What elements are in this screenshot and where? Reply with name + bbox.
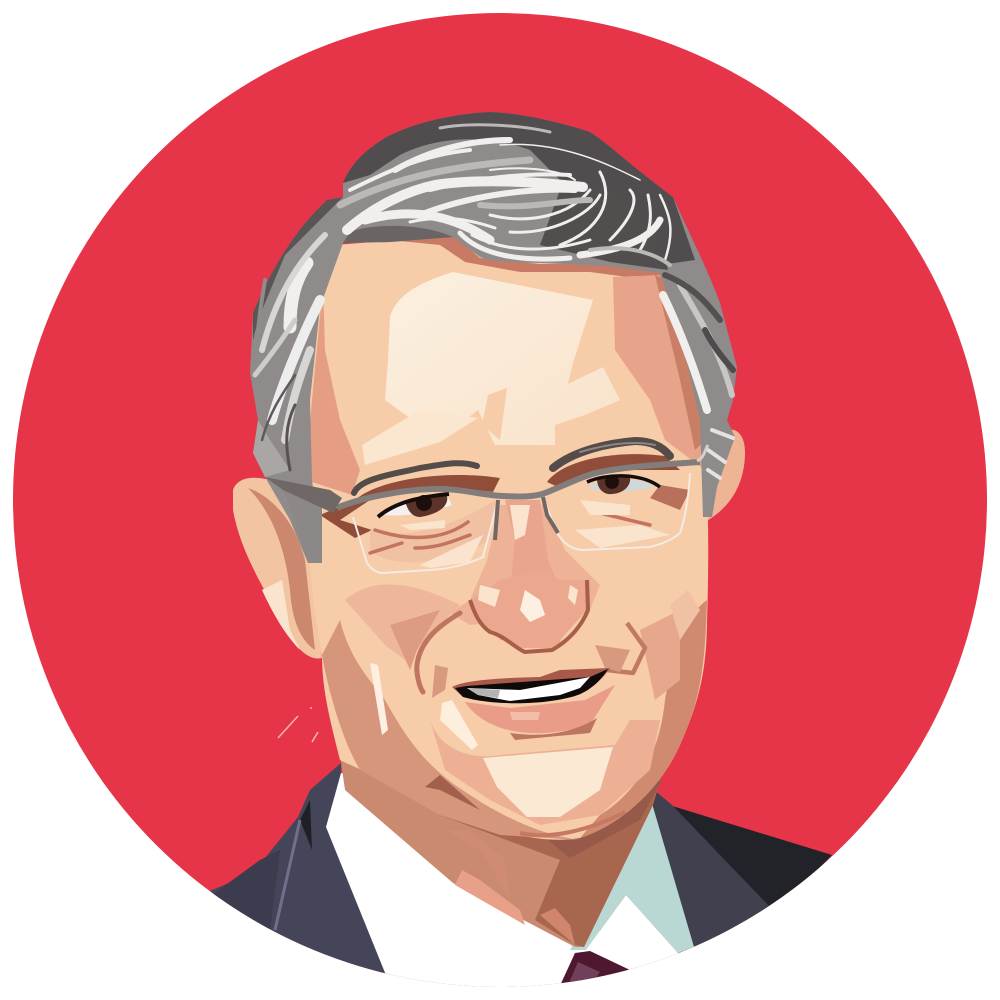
nasolabial crease left xyxy=(417,613,460,692)
left temple shade xyxy=(306,285,360,495)
glasses xyxy=(265,445,708,573)
chin shadow xyxy=(430,720,660,825)
brow shadow left xyxy=(320,475,500,538)
sideburn left xyxy=(283,490,322,563)
hair gray strands top xyxy=(340,125,670,265)
left ear xyxy=(233,478,322,658)
glasses front bar xyxy=(337,462,700,508)
glasses temple arm xyxy=(265,477,342,513)
crease shadow left xyxy=(390,610,440,670)
hairline shadow xyxy=(390,235,665,282)
forehead highlight xyxy=(385,272,620,445)
suit jacket right xyxy=(652,792,832,954)
mouth corners xyxy=(432,645,630,698)
glasses left lens xyxy=(353,500,498,573)
hair white strands top xyxy=(347,140,670,260)
right eye xyxy=(587,475,660,494)
stray marks xyxy=(278,708,318,742)
under eye highlight left xyxy=(400,520,483,568)
hair dark lower wave xyxy=(343,226,453,243)
chin highlight xyxy=(483,747,613,817)
hair dark left xyxy=(253,197,343,340)
nose outline xyxy=(470,580,588,652)
glasses hinge xyxy=(697,445,708,461)
chin underline xyxy=(520,812,625,835)
glasses nose pad right xyxy=(543,497,558,533)
mouth xyxy=(452,668,610,703)
nose bridge xyxy=(500,500,565,645)
lower lip shade xyxy=(465,685,615,733)
right lower face xyxy=(580,600,707,838)
under eye highlight right xyxy=(575,500,670,548)
right temple shade xyxy=(613,275,705,470)
glasses nose pad left xyxy=(495,500,498,540)
hair strands left xyxy=(255,235,325,470)
nose side shading xyxy=(450,505,600,625)
face base xyxy=(307,235,708,840)
brow shadow right xyxy=(547,454,680,488)
nasolabial crease right xyxy=(607,623,645,673)
hair dark top rim xyxy=(343,112,695,265)
left eye xyxy=(378,494,452,517)
left lower face xyxy=(322,620,580,840)
hair strands right xyxy=(663,275,733,478)
hair xyxy=(250,112,737,563)
right eyebrow xyxy=(553,441,670,468)
suit jacket left xyxy=(210,763,390,974)
left cheek plane xyxy=(345,584,460,660)
cheek highlight left xyxy=(370,663,388,735)
left eyebrow xyxy=(354,463,477,493)
nose tip xyxy=(470,570,587,648)
under eye creases xyxy=(370,513,650,553)
glasses right lens xyxy=(543,473,690,550)
hair mass xyxy=(250,112,737,563)
eye socket left xyxy=(370,500,495,562)
neck xyxy=(340,760,662,947)
necktie xyxy=(561,951,629,984)
shirt xyxy=(326,773,694,1000)
face xyxy=(306,235,708,840)
figure clothing xyxy=(210,760,832,987)
eyebrows xyxy=(354,441,670,493)
right ear xyxy=(700,430,745,522)
